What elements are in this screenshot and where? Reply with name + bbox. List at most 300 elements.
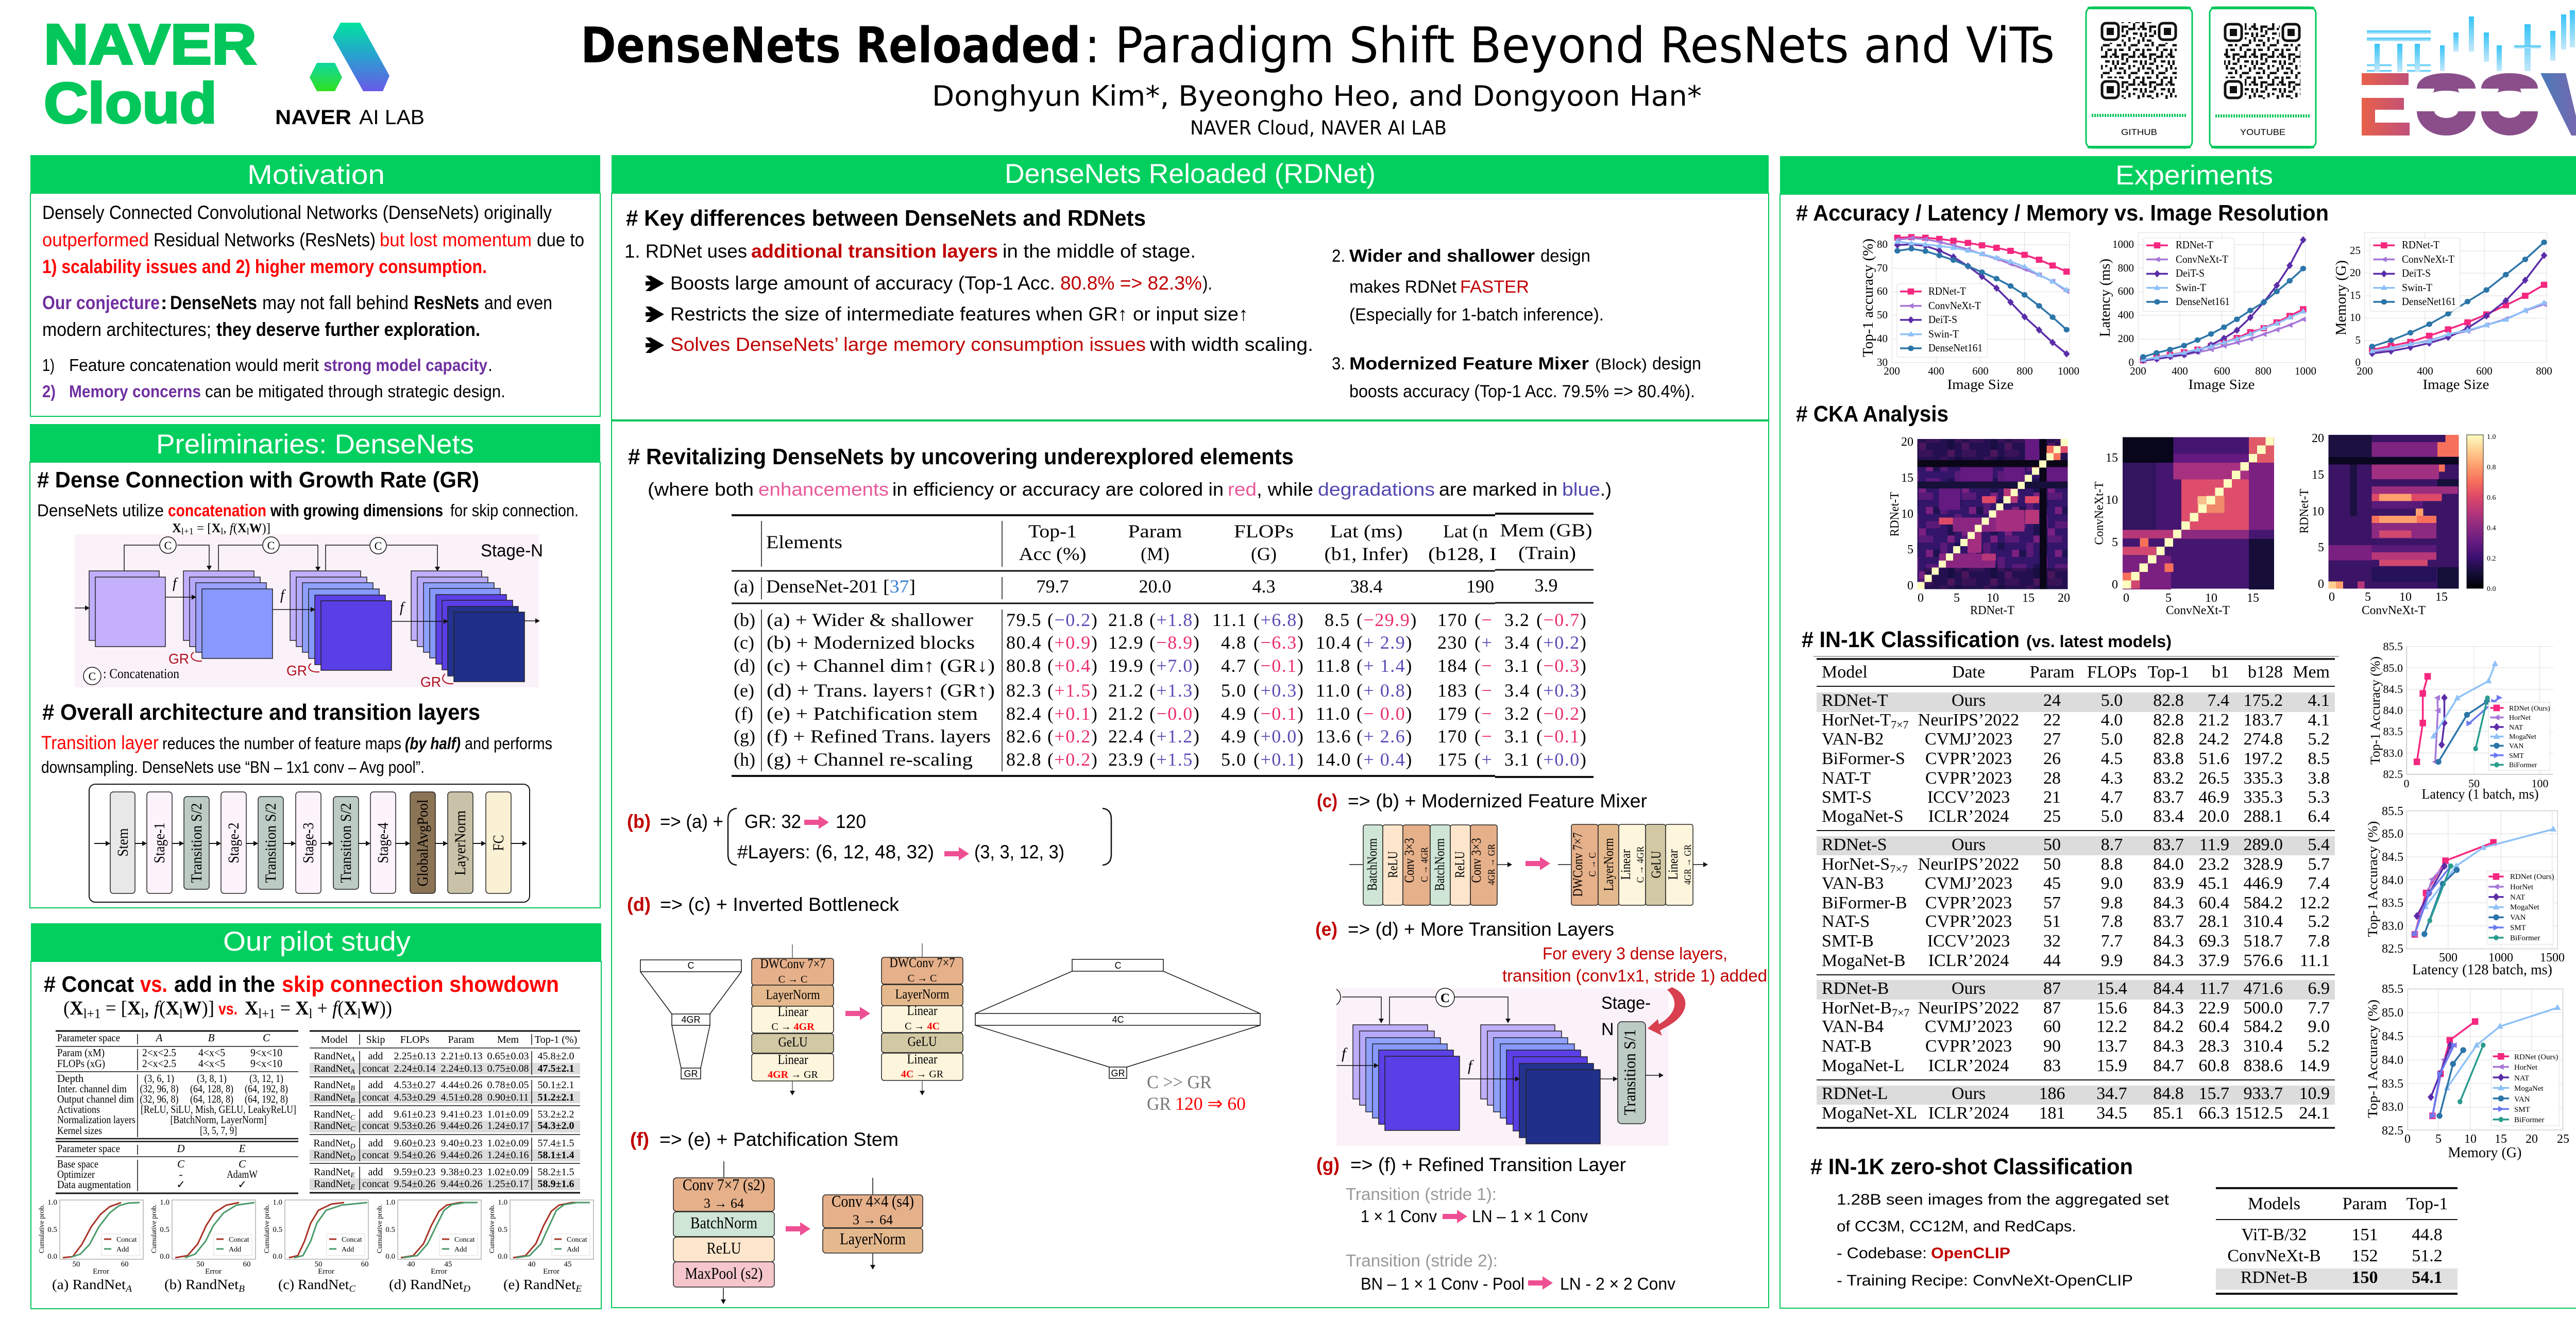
chart: RandNet B CDF: 0.5: [160, 1226, 170, 1234]
table: RandNet results: 4.51±0.28: [441, 1092, 482, 1103]
table: zero-shot results: Models: [2248, 1194, 2300, 1213]
chart: accuracy vs memory: VAN: [2514, 1095, 2530, 1104]
chart: memory vs image size: RDNet-T: [2402, 239, 2439, 251]
chart: accuracy vs memory: NAT: [2514, 1074, 2529, 1083]
table: IN-1K classification: 9.0: [2101, 874, 2123, 893]
logo: NAVER Cloud: Cloud: [44, 72, 217, 135]
chart: CKA heatmap RDNet vs ConvNeXt: 10: [2399, 590, 2412, 604]
table: RandNet results: RandNet: [313, 1149, 355, 1162]
diagram: dense block stage-N: l: [221, 526, 223, 536]
text block: dense connection description: DenseNets utilize: [37, 501, 164, 520]
chart: accuracy vs image size: 800: [2016, 365, 2033, 377]
chart: latency vs image size: DenseNet161: [2176, 295, 2230, 308]
chart: accuracy vs latency 128 batch: VAN: [2510, 914, 2526, 922]
chart: RandNet A CDF: 60: [121, 1260, 129, 1269]
table: IN-1K classification: 20.0: [2199, 807, 2229, 826]
chart: CKA heatmap RDNet vs RDNet: [1888, 435, 2070, 617]
table: IN-1K classification: 288.1: [2243, 807, 2283, 826]
table: parameter space: Activations: [57, 1103, 100, 1115]
chart: accuracy vs latency 1 batch: [2368, 640, 2553, 802]
chart: accuracy vs image size: 1000: [2058, 365, 2079, 377]
text block: zero-shot description: OpenCLIP: [1931, 1245, 2010, 1262]
chart: accuracy vs latency 1 batch: 85.0: [2383, 662, 2403, 674]
chart: RandNet C CDF: 60: [361, 1260, 369, 1269]
table: revitalizing elements: FLOPs: [1234, 521, 1294, 542]
table: zero-shot results: 150: [2351, 1268, 2378, 1287]
formula: concat vs add: f(X: [154, 997, 180, 1019]
diagram: stem after: Conv 4×4 (s4): [832, 1192, 914, 1210]
diagram: dense block stage-N: C: [164, 539, 172, 552]
formula: concat vs add: )): [380, 997, 393, 1019]
table: parameter space: B: [208, 1031, 215, 1044]
table: IN-1K classification: 7×7: [1891, 718, 1908, 731]
diagram: stem before: MaxPool (s2): [685, 1264, 762, 1282]
table: zero-shot results: ViT-B/32: [2241, 1225, 2307, 1244]
table: RandNet results: 1.24±0.17: [487, 1120, 529, 1131]
diagram: stem before: ReLU: [707, 1239, 741, 1257]
table: zero-shot results: Top-1: [2406, 1194, 2448, 1213]
chart: accuracy vs memory: 0: [2404, 1132, 2411, 1146]
text block: conjecture: :: [161, 292, 167, 313]
diagram: overall architecture: Stage-4: [375, 822, 392, 864]
diagram: overall architecture: FC: [490, 835, 507, 851]
table: IN-1K classification: 84.2: [2153, 1017, 2184, 1036]
table: IN-1K classification: 5.2: [2308, 1037, 2330, 1056]
text block: conjecture: may not fall behind: [262, 292, 409, 313]
table: IN-1K classification: 12.2: [2096, 1017, 2127, 1036]
table: RandNet results: 2.24±0.13: [441, 1063, 482, 1074]
table: IN-1K classification: 83.7: [2153, 835, 2184, 854]
section (c): feature mixer heading: => (b) + Modernized Feature Mixer: [1348, 790, 1647, 811]
chart: RandNet B CDF: Concat: [229, 1236, 249, 1244]
chart: latency vs image size: 800: [2255, 365, 2272, 377]
chart: memory vs image size: Swin-T: [2402, 281, 2432, 294]
subheading: concat vs add: add in the: [174, 972, 275, 997]
diagram: inverted funnel: 4C: [1112, 1014, 1124, 1025]
table: revitalizing elements: 11.0: [1316, 703, 1351, 724]
diagram: block after: DWConv 7×7: [889, 955, 955, 970]
table: revitalizing elements: 21.2: [1108, 703, 1144, 724]
chart: RandNet E CDF: 0.0: [498, 1253, 507, 1261]
table: RandNet results: 50.1±2.1: [538, 1079, 574, 1091]
table: IN-1K classification: 5.0: [2101, 730, 2123, 749]
table: IN-1K classification: 15.7: [2199, 1084, 2229, 1103]
table: RandNet results: concat: [362, 1149, 389, 1161]
table: RandNet results: 9.54±0.26: [394, 1178, 435, 1190]
table: IN-1K classification: 5.4: [2308, 835, 2330, 854]
table: IN-1K classification: 82.8: [2153, 711, 2184, 730]
table: IN-1K classification: ICLR’2024: [1928, 951, 2009, 970]
diagram: mixer before: Conv 3×3: [1402, 838, 1417, 883]
table: IN-1K classification: SMT-S: [1822, 788, 1872, 807]
text block: difference 3: (Block): [1595, 356, 1647, 373]
chart: accuracy vs latency 128 batch: HorNet: [2510, 883, 2534, 891]
section (b): GR and layers: [627, 808, 1111, 865]
diagram: block after: GeLU: [908, 1034, 937, 1049]
table: IN-1K classification: 576.6: [2243, 951, 2283, 970]
text block: difference 1: Boosts large amount of accuracy (Top-1 Acc.: [670, 273, 1055, 294]
table: revitalizing elements: (+1.5): [1047, 680, 1098, 701]
chart: latency vs image size: 600: [2117, 285, 2134, 297]
chart: RandNet B CDF: (b) RandNet: [164, 1277, 233, 1292]
table: IN-1K classification: NAT-B: [1822, 1037, 1872, 1056]
text block: motivation paragraph: Densely Connected Convolutional Networks (DenseNets) originally: [42, 202, 552, 223]
table: RandNet results: 0.90±0.11: [487, 1092, 529, 1103]
chart: accuracy vs latency 1 batch: 50: [2468, 777, 2480, 790]
chart: CKA heatmap RDNet vs RDNet: 0: [1918, 591, 1924, 605]
chart: latency vs image size: 800: [2117, 262, 2134, 274]
table: revitalizing elements: 179: [1437, 703, 1467, 724]
diagram: more transition layers: C: [1440, 991, 1450, 1005]
formula: concat vs add: =: [276, 997, 295, 1019]
table: revitalizing elements: (−8.9): [1149, 632, 1200, 653]
logo: NAVER Cloud: [44, 13, 257, 135]
chart: accuracy vs latency 128 batch: MogaNet: [2510, 903, 2539, 911]
table: RandNet results: D: [349, 1143, 355, 1151]
table: revitalizing elements: 21.8: [1108, 610, 1144, 630]
chart: accuracy vs image size: [1860, 232, 2079, 392]
table: RandNet results: 9.54±0.26: [394, 1149, 435, 1161]
table: IN-1K classification: 83.9: [2153, 874, 2184, 893]
chart: accuracy vs image size: Swin-T: [1928, 328, 1959, 340]
QR card: GitHub: GITHUB: [2121, 127, 2157, 137]
table: IN-1K classification: NAT-S: [1822, 912, 1870, 931]
chart: accuracy vs image size: ConvNeXt-T: [1928, 299, 1981, 312]
table: RandNet results: 2.24±0.14: [394, 1063, 435, 1074]
legend: CKA colourbar: 0.2: [2487, 555, 2496, 563]
diagram: mixer after: DWConv 7×7: [1570, 833, 1585, 897]
chart: RandNet D CDF: Add: [454, 1246, 467, 1254]
table: revitalizing elements: (+: [1475, 632, 1493, 653]
section (b): GR and layers: (3, 3, 12, 3): [974, 841, 1064, 863]
chart: latency vs image size: DeiT-S: [2176, 267, 2205, 279]
table: zero-shot results: 51.2: [2412, 1246, 2443, 1265]
chart: RandNet A CDF: Error: [93, 1267, 109, 1276]
formula: concat vs add: +: [312, 997, 332, 1019]
chart: accuracy vs memory: 5: [2435, 1132, 2442, 1146]
section (b): GR and layers: (b): [627, 811, 651, 832]
chart: RandNet A CDF: A: [125, 1283, 132, 1294]
chart: accuracy vs latency 1 batch: 84.0: [2383, 704, 2403, 717]
table: parameter space: 4<x<5: [198, 1046, 225, 1059]
text block: transition layer description: downsampling. DenseNets use “BN – 1x1 conv – Avg pool”.: [41, 758, 425, 776]
chart: accuracy vs memory: 85.5: [2382, 983, 2403, 996]
table: parameter space: Param (xM): [57, 1046, 105, 1059]
icon: arrow stem: [786, 1222, 810, 1236]
table: revitalizing elements: 5.0: [1221, 680, 1247, 701]
table: RandNet results: add: [368, 1051, 383, 1062]
section (g): refined transition: Transition (stride 2):: [1346, 1251, 1498, 1270]
callout: GR 120 to 60: [1147, 1072, 1246, 1114]
text block: conjecture: they deserve further exploration.: [216, 319, 480, 340]
callout: GR 120 to 60: GR: [1147, 1093, 1171, 1114]
chart: accuracy vs image size: RDNet-T: [1928, 285, 1966, 297]
diagram: block after: C → C: [908, 973, 937, 984]
table: revitalizing elements: (a): [734, 576, 754, 597]
chart: RandNet E CDF: Cumulative prob.: [488, 1205, 496, 1253]
chart: RandNet E CDF: 40: [528, 1260, 536, 1269]
table: revitalizing elements: (+1.8): [1149, 610, 1200, 630]
chart: accuracy vs image size: 400: [1928, 365, 1944, 377]
text block: dense connection description: [37, 501, 579, 520]
table: RandNet results: B: [350, 1085, 355, 1092]
table: IN-1K classification: 186: [2039, 1084, 2065, 1103]
table: revitalizing elements: (−0.7): [1536, 610, 1587, 630]
diagram: dense block stage-N: C: [89, 670, 96, 683]
chart: accuracy vs memory: 84.0: [2382, 1054, 2403, 1067]
diagram: mixer after: Linear: [1618, 849, 1633, 880]
chart: RandNet C CDF: 1.0: [273, 1198, 282, 1207]
table: IN-1K classification: 8.5: [2308, 749, 2330, 768]
table: IN-1K classification: 10.9: [2299, 1084, 2330, 1103]
table: IN-1K classification: 584.2: [2243, 893, 2283, 912]
chart: CKA heatmap RDNet vs RDNet: 20: [2058, 591, 2070, 605]
text block: difference 2: Wider and shallower: [1349, 246, 1535, 266]
legend: CKA colourbar: 1.0: [2487, 433, 2496, 441]
chart: RandNet C CDF: 0.5: [273, 1226, 282, 1234]
table: parameter space: Inter. channel dim: [57, 1083, 127, 1095]
chart: memory vs image size: 600: [2476, 365, 2493, 377]
table: revitalizing elements: 4.3: [1252, 576, 1276, 597]
table: revitalizing elements: 82.6: [1006, 726, 1042, 747]
table: IN-1K classification: 7.7: [2101, 932, 2123, 951]
text block: transition layer description: reduces the number of feature maps: [162, 734, 401, 753]
table: IN-1K classification: 84.0: [2153, 855, 2184, 874]
table: revitalizing elements: (+0.2): [1047, 726, 1098, 747]
table: revitalizing elements: 79.5: [1006, 610, 1042, 630]
table: parameter space: Output channel dim: [57, 1093, 134, 1105]
table: revitalizing elements: (+ 0.4): [1357, 749, 1413, 770]
text block: difference 1: Restricts the size of intermediate features when GR↑ or input size↑: [670, 303, 1248, 325]
diagram: mixer before: BatchNorm: [1432, 838, 1447, 891]
table: IN-1K classification: 175.2: [2243, 691, 2283, 710]
table: IN-1K classification: 584.2: [2243, 1017, 2283, 1036]
diagram: dense block stage-N: C: [375, 539, 382, 552]
text block: difference 1: in the middle of stage.: [1003, 241, 1196, 262]
panel: DenseNets Reloaded: [612, 155, 1769, 1308]
chart: accuracy vs image size: 40: [1877, 332, 1888, 345]
table: IN-1K classification: NAT-T: [1822, 769, 1871, 788]
section (g): refined transition: LN - 2 × 2 Conv: [1560, 1274, 1675, 1293]
table: IN-1K classification: 7×7: [1890, 863, 1908, 875]
diagram: more transition layers: Transition S/1: [1620, 1029, 1639, 1115]
chart: accuracy vs latency 128 batch: NAT: [2510, 893, 2525, 902]
diagram: dense block stage-N: GR: [420, 674, 441, 690]
diagram: overall architecture: Transition S/2: [188, 803, 205, 883]
table: revitalizing elements: 170: [1437, 610, 1467, 630]
table: IN-1K classification: 21: [2043, 788, 2061, 807]
table: parameter space: (64, 128, 8): [190, 1083, 233, 1095]
table: IN-1K classification: 471.6: [2243, 979, 2283, 998]
diagram: stem before: [673, 1161, 774, 1304]
table: IN-1K classification: CVPR’2023: [1925, 912, 2012, 931]
diagram: inverted funnel: C: [1115, 960, 1121, 971]
chart: accuracy vs memory: Top-1 Accuracy (%): [2365, 1000, 2380, 1118]
table: RandNet results: 0.65±0.03: [487, 1051, 529, 1062]
heading: DenseNets Reloaded (RDNet): DenseNets Reloaded (RDNet): [1005, 159, 1376, 189]
table: IN-1K classification: VAN-B4: [1822, 1017, 1884, 1036]
chart: accuracy vs memory: 10: [2464, 1132, 2477, 1146]
table: IN-1K classification: 446.9: [2243, 874, 2283, 893]
table: RandNet results: Skip: [366, 1034, 385, 1045]
table: parameter space: (64, 192, 8): [245, 1083, 288, 1095]
chart: accuracy vs memory: SMT: [2514, 1106, 2530, 1114]
text block: difference 1: 80.8% => 82.3%: [1060, 273, 1202, 294]
text block: difference 2: [1332, 246, 1604, 325]
table: revitalizing elements: (−0.1): [1253, 655, 1304, 676]
table: RandNet results: 9.53±0.26: [394, 1120, 435, 1131]
table: IN-1K classification: 50: [2043, 835, 2061, 854]
table: revitalizing elements: (+0.2): [1536, 632, 1587, 653]
chart: RandNet C CDF: C: [349, 1283, 356, 1294]
diagram: dense block stage-N: GR: [168, 651, 189, 667]
table: IN-1K classification: 7×7: [1892, 1006, 1909, 1019]
table: IN-1K classification: 7.7: [2308, 999, 2330, 1018]
table: RandNet results: 45.8±2.0: [538, 1051, 574, 1062]
table: IN-1K classification: 51.6: [2199, 749, 2229, 768]
chart: CKA heatmap RDNet vs ConvNeXt: 5: [2318, 541, 2324, 554]
text block: colour note: enhancements: [758, 479, 889, 500]
diagram: mixer after: C → 4GR: [1635, 846, 1646, 883]
title: [581, 18, 2055, 74]
chart: memory vs image size: ConvNeXt-T: [2402, 253, 2454, 265]
table: revitalizing elements: (−0.0): [1149, 703, 1200, 724]
chart: latency vs image size: 400: [2117, 309, 2134, 321]
formula: concat vs add: = [: [101, 997, 127, 1019]
text block: colour note: in efficiency or accuracy are colored in: [892, 479, 1224, 500]
subheading: accuracy latency memory: # Accuracy / Latency / Memory vs. Image Resolution: [1796, 200, 2329, 226]
text block: difference 3: [1332, 354, 1701, 401]
table: IN-1K classification: 8.8: [2101, 855, 2123, 874]
diagram: overall architecture: Transition S/2: [337, 803, 354, 883]
table: IN-1K classification: RDNet-T: [1822, 691, 1888, 710]
text block: numbered points: .: [488, 356, 493, 375]
table: revitalizing elements: (+0.9): [1047, 632, 1098, 653]
section (g): refined transition: LN – 1 × 1 Conv: [1472, 1207, 1588, 1226]
chart: accuracy vs latency 128 batch: Latency (128 batch, ms): [2412, 962, 2552, 978]
section (f): patchification heading: => (e) + Patchification Stem: [659, 1129, 899, 1150]
diagram: mixer after: LayerNorm: [1601, 838, 1616, 891]
chart: latency vs image size: Swin-T: [2176, 281, 2206, 294]
table: IN-1K classification: 84.3: [2153, 893, 2184, 912]
chart: RandNet C CDF: 50: [314, 1260, 323, 1269]
text block: transition layer description: (by half): [405, 734, 461, 753]
table: parameter space: Depth: [57, 1072, 84, 1085]
chart: accuracy vs latency 1 batch: 82.5: [2383, 768, 2403, 781]
chart: RandNet C CDF: (c) RandNet: [278, 1277, 347, 1292]
table: parameter space: (64, 192, 8): [245, 1093, 288, 1105]
table: IN-1K classification: CVMJ’2023: [1925, 1017, 2012, 1036]
QR card: YouTube: YOUTUBE: [2240, 127, 2285, 137]
heading: Preliminaries: Preliminaries: DenseNets: [156, 429, 474, 460]
title: DenseNets Reloaded: [581, 18, 1081, 74]
diagram: block before: DWConv 7×7: [760, 956, 825, 971]
chart: memory vs image size: 10: [2350, 311, 2361, 324]
legend: CKA colourbar: 0.8: [2487, 464, 2496, 471]
table: RandNet results: 1.24±0.16: [487, 1149, 529, 1161]
table: RandNet results: 9.59±0.23: [394, 1166, 435, 1178]
table: revitalizing elements: 4.9: [1221, 726, 1247, 747]
table: IN-1K classification: VAN-B3: [1822, 874, 1884, 893]
diagram: block after: Linear: [907, 1052, 938, 1067]
table: revitalizing elements: (+ 2.6): [1357, 726, 1413, 747]
chart: CKA heatmap ConvNeXt vs ConvNeXt: 10: [2205, 591, 2217, 605]
chart: CKA heatmap RDNet vs ConvNeXt: RDNet-T: [2298, 488, 2311, 534]
callout: GR 120 to 60: 120 ⇒ 60: [1175, 1093, 1246, 1114]
table: IN-1K classification: NeurIPS’2022: [1918, 999, 2019, 1018]
text block: colour note: (where both: [648, 479, 754, 500]
chart: memory vs image size: 20: [2350, 266, 2361, 279]
table: IN-1K classification: 45: [2043, 874, 2061, 893]
text block: difference 2: (Especially for 1-batch inference).: [1349, 305, 1604, 325]
chart: latency vs image size: Image Size: [2189, 377, 2255, 392]
table: revitalizing elements: 19.9: [1108, 655, 1144, 676]
table: revitalizing elements: 5.0: [1221, 749, 1247, 770]
table: IN-1K classification: 328.9: [2243, 855, 2283, 874]
table: revitalizing elements: 4.8: [1221, 632, 1247, 653]
text block: dense connection description: for skip connection.: [450, 501, 579, 520]
diagram: block before: GeLU: [778, 1035, 808, 1050]
chart: accuracy vs latency 1 batch: 83.0: [2383, 747, 2403, 759]
diagram: overall architecture: LayerNorm: [452, 810, 469, 875]
table: IN-1K classification: 518.7: [2243, 932, 2283, 951]
table: IN-1K classification: 11.9: [2199, 835, 2229, 854]
affiliations: NAVER Cloud, NAVER AI LAB: [1190, 117, 1447, 139]
table: revitalizing elements: 3.1: [1504, 749, 1530, 770]
chart: RandNet A CDF: Concat: [116, 1236, 137, 1244]
table: RandNet results: 57.4±1.5: [538, 1138, 574, 1149]
table: parameter space: C: [239, 1158, 246, 1170]
diagram: dense block stage-N: X: [172, 521, 181, 535]
chart: latency vs image size: 0: [2129, 356, 2134, 368]
chart: RandNet A CDF: 0.5: [47, 1226, 57, 1234]
chart: CKA heatmap ConvNeXt vs ConvNeXt: 0: [2123, 591, 2129, 605]
diagram: dense block stage-N: GR: [286, 663, 307, 679]
table: revitalizing elements: 79.7: [1037, 576, 1069, 597]
table: revitalizing elements: (+0.1): [1047, 703, 1098, 724]
text block: difference 1: ).: [1202, 273, 1212, 294]
chart: RandNet A CDF: 50: [72, 1260, 80, 1269]
table: parameter space: (64, 128, 8): [190, 1093, 233, 1105]
chart: RandNet D CDF: 0.0: [385, 1253, 395, 1261]
diagram: block after: Linear: [907, 1003, 938, 1018]
table: zero-shot results: ConvNeXt-B: [2227, 1246, 2321, 1265]
table: IN-1K classification: Ours: [1952, 835, 1986, 854]
icon: arrow mixer: [1526, 857, 1550, 870]
table: IN-1K classification: RDNet-B: [1822, 979, 1889, 998]
table: IN-1K classification: CVPR’2023: [1925, 749, 2012, 768]
chart: accuracy vs memory: Memory (G): [2448, 1145, 2521, 1161]
table: IN-1K classification: 197.2: [2243, 749, 2283, 768]
table: IN-1K classification: CVPR’2023: [1925, 893, 2012, 912]
table: revitalizing elements: (e): [734, 680, 754, 701]
table: IN-1K classification: 14.9: [2299, 1056, 2330, 1075]
table: RandNet results: Top-1 (%): [535, 1034, 577, 1045]
table: revitalizing elements: 12.9: [1108, 632, 1144, 653]
table: parameter space: 4<x<5: [198, 1057, 225, 1070]
section (g): refined transition: Transition (stride 1):: [1346, 1185, 1497, 1204]
text block: motivation paragraph: outperformed: [42, 229, 149, 250]
table: revitalizing elements: 3.2: [1504, 610, 1530, 630]
table: revitalizing elements: (g) + Channel re-scaling: [767, 749, 973, 770]
callout: GR 120 to 60: C >> GR: [1147, 1072, 1212, 1092]
chart: accuracy vs memory: 15: [2495, 1132, 2507, 1146]
diagram: dense block stage-N: l+1: [181, 526, 194, 536]
text block: motivation paragraph: 1) scalability issues and 2) higher memory consumption.: [42, 256, 487, 277]
table: RandNet results: RandNet: [314, 1178, 355, 1191]
table: parameter space: 9<x<10: [250, 1046, 282, 1059]
table: IN-1K classification: 84.7: [2153, 1056, 2184, 1075]
